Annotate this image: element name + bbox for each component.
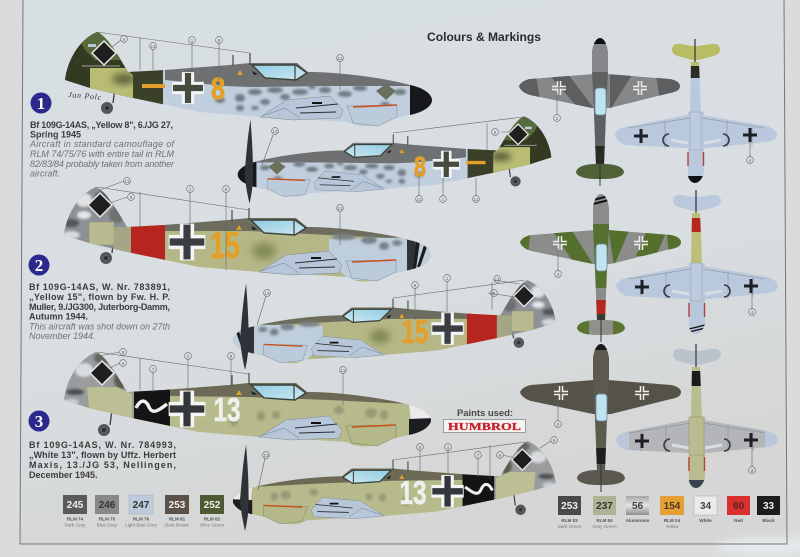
number 13: 13 — [214, 391, 240, 428]
callouts aircraft 2: 13 — [124, 179, 130, 184]
colour swatches right: Red — [734, 518, 743, 523]
text block aircraft 1: aircraft. — [30, 168, 60, 178]
callouts right view 3: 1 — [447, 445, 450, 450]
callouts aircraft 3: 7 — [152, 367, 155, 372]
badge 1 — [30, 92, 52, 114]
aircraft 1 top view — [519, 36, 690, 186]
callouts right view 3: 5 — [499, 453, 502, 458]
callouts right view 2: 1 — [446, 276, 449, 281]
colour swatches left: RLM 76 — [133, 516, 150, 522]
aircraft 1 top view: 2 — [556, 116, 559, 121]
callouts right view 1: 13 — [272, 129, 278, 134]
text block aircraft 3 — [29, 440, 176, 480]
colour swatches right: 253 — [561, 501, 578, 512]
callouts right view 3: 7 — [477, 453, 480, 458]
colour swatches right: White — [699, 518, 712, 523]
text block aircraft 1: Spring 1945 — [30, 130, 81, 140]
callouts right view 2 — [257, 275, 525, 325]
callouts aircraft 3: 6 — [122, 361, 125, 366]
callouts aircraft 1: 13 — [150, 44, 156, 49]
colour swatches right: 237 — [596, 501, 613, 512]
badge 2 — [28, 254, 50, 276]
colour swatches left: RLM 75 — [99, 516, 116, 522]
aircraft 3 underside view: 3 — [751, 468, 754, 473]
text block aircraft 2: „Yellow 15", flown by Fw. H. P. — [29, 292, 170, 302]
callouts right view 1: 12 — [473, 197, 479, 202]
aircraft 2 left side view — [59, 175, 439, 285]
aircraft 3 top view: 2 — [557, 422, 560, 427]
callouts aircraft 3: 13 — [340, 368, 346, 373]
text block aircraft 3: Bf 109G-14AS, W. Nr. 784993, — [29, 440, 176, 450]
callouts aircraft 1: 9 — [218, 38, 221, 43]
text block aircraft 2: Autumn 1944. — [29, 312, 88, 322]
colour swatches left: 246 — [99, 500, 116, 511]
colour swatches right: Yellow — [665, 524, 679, 529]
colour swatches right: 33 — [763, 501, 774, 512]
number 8: 8 — [211, 71, 225, 106]
aircraft 3 underside view — [613, 344, 781, 490]
colour swatches right: RLM 04 — [664, 518, 681, 523]
callouts right view 1: 1 — [442, 197, 445, 202]
callouts right view 3: 8 — [553, 438, 556, 443]
callouts right view 2: 13 — [264, 291, 270, 296]
text block aircraft 2: Muller, 9./JG300, Juterborg-Damm, — [29, 302, 170, 312]
number 15 right view: 15 — [402, 313, 428, 350]
aircraft 2 underside view — [616, 190, 778, 335]
aircraft 1 underside view: 4 — [749, 158, 752, 163]
aircraft 1 underside view — [615, 39, 777, 184]
callouts aircraft 1: 13 — [337, 56, 343, 61]
text block aircraft 2 — [29, 282, 170, 341]
colour swatches left: 247 — [133, 500, 150, 511]
colour swatches left: 245 — [67, 500, 84, 511]
callouts aircraft 3: 1 — [187, 354, 190, 359]
number 13 right view: 13 — [400, 474, 426, 511]
number 8 right view: 8 — [414, 151, 426, 182]
callouts right view 1: 11 — [417, 197, 422, 202]
aircraft 2 top view: 2 — [557, 272, 560, 277]
callouts aircraft 2: 5 — [130, 195, 133, 200]
colour swatches left — [63, 495, 225, 528]
text block aircraft 2: This aircraft was shot down on 27th — [29, 322, 170, 332]
colour swatches right: 56 — [632, 501, 643, 512]
aircraft 3 left side view — [59, 340, 439, 450]
badge 2: 2 — [35, 256, 43, 275]
colour swatches right: RLM 83 — [561, 518, 578, 523]
badge 3 — [28, 410, 50, 432]
colour swatches left: RLM 81 — [169, 516, 186, 522]
colour swatches left: Dark Grey — [65, 522, 86, 528]
signature: Jan Polc — [68, 90, 102, 102]
aircraft 1 right side view — [231, 106, 556, 204]
aircraft 3 right side view — [226, 431, 560, 531]
text block aircraft 3: „White 13", flown by Uffz. Herbert — [29, 450, 176, 460]
colour swatches right: Dark Green — [558, 524, 582, 529]
white paint cloud — [716, 537, 800, 555]
callouts right view 2: 9 — [414, 283, 417, 288]
colour swatches right: Aluminium — [626, 518, 649, 523]
text block aircraft 1: Aircraft in standard camouflage of — [29, 139, 175, 149]
callouts aircraft 3: 8 — [230, 354, 233, 359]
colour swatches right — [558, 496, 780, 529]
number 15: 15 — [210, 225, 240, 266]
title: Colours & Markings — [427, 32, 541, 44]
text block aircraft 3: Maxis, 13./JG 53, Nellingen, — [29, 460, 176, 470]
callouts aircraft 2 — [97, 178, 343, 270]
text block aircraft 2: Bf 109G-14AS, W. Nr. 783891, — [29, 282, 170, 292]
callouts right view 3: 13 — [263, 453, 269, 458]
colour swatches left: Dark Brown — [165, 522, 189, 528]
text block aircraft 1 — [29, 120, 175, 178]
colour swatches left: RLM 74 — [67, 516, 84, 522]
colour swatches left: Blue Grey — [97, 522, 118, 528]
colour swatches right: Black — [762, 518, 775, 523]
humbrol logo: HUMBROL — [448, 421, 521, 433]
aircraft 2 top view — [516, 192, 691, 342]
callouts right view 1 — [262, 117, 523, 202]
badge 1: 1 — [37, 94, 45, 113]
paints used label: Paints used: — [457, 408, 513, 419]
colour swatches right: 60 — [733, 501, 744, 512]
humbrol logo — [444, 420, 526, 433]
callouts aircraft 1: 1 — [191, 38, 194, 43]
colour swatches left: 253 — [169, 500, 186, 511]
aircraft 2 underside view: 4 — [751, 310, 754, 315]
callouts right view 3: 8 — [419, 445, 422, 450]
callouts aircraft 1 — [97, 32, 343, 90]
colour swatches left: 252 — [204, 500, 221, 511]
callouts aircraft 2: 9 — [225, 187, 228, 192]
colour swatches right: Grey Green — [592, 524, 617, 529]
callouts right view 3 — [258, 437, 557, 490]
callouts aircraft 3: 8 — [122, 350, 125, 355]
colour swatches left: Light Blue Grey — [125, 522, 158, 528]
colour swatches right: RLM 84 — [596, 518, 613, 523]
text block aircraft 1: 82/83/84 probably taken from another — [30, 159, 175, 169]
colour swatches right: 154 — [664, 501, 681, 512]
text block aircraft 3: December 1945. — [29, 470, 98, 480]
callouts aircraft 3 — [97, 349, 346, 405]
aircraft 3 top view — [520, 342, 681, 492]
text block aircraft 1: RLM 74/75/76 with entire tail in RLM — [30, 149, 174, 159]
text block aircraft 2: November 1944. — [29, 331, 96, 341]
callouts aircraft 1: 5 — [123, 37, 126, 42]
callouts right view 2: 5 — [493, 291, 496, 296]
colour swatches left: RLM 82 — [204, 516, 221, 522]
text block aircraft 1: Bf 109G-14AS, „Yellow 8", 6./JG 27, — [30, 120, 173, 130]
colour swatches right: 34 — [700, 501, 711, 512]
callouts right view 2: 13 — [494, 277, 500, 282]
callouts aircraft 2: 1 — [189, 187, 192, 192]
colour swatches left: Olive Green — [200, 522, 225, 528]
aircraft 1 left side view — [60, 20, 440, 130]
callouts right view 1: 5 — [494, 130, 497, 135]
callouts aircraft 2: 13 — [337, 206, 343, 211]
aircraft 2 right side view — [226, 270, 560, 370]
badge 3: 3 — [35, 412, 43, 431]
